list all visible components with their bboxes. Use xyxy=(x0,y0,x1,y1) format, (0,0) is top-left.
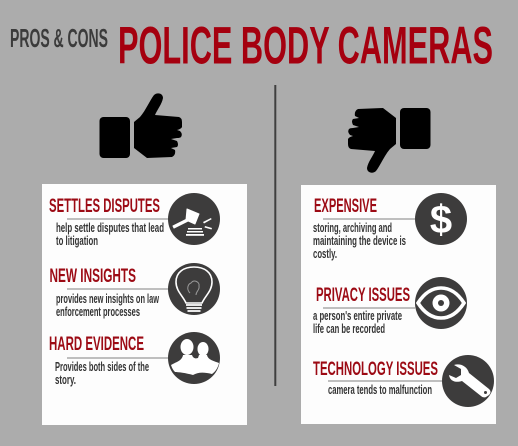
icon: wrench xyxy=(442,355,494,407)
pro: settles disputes: SETTLES DISPUTES xyxy=(49,195,160,217)
pro: hard evidence: HARD EVIDENCE xyxy=(49,333,144,355)
pro: new insights xyxy=(50,265,170,319)
pro: hard evidence: Provides both sides of the xyxy=(55,360,149,374)
con: expensive: costly. xyxy=(313,247,337,261)
con: privacy issues: life can be recorded xyxy=(313,322,385,336)
con: expensive: maintaining the device is xyxy=(313,234,406,248)
pro: new insights: enforcement processes xyxy=(56,305,140,319)
con: technology issues: camera tends to malfunction xyxy=(328,383,432,397)
icon: people xyxy=(168,332,220,384)
center divider xyxy=(274,85,276,386)
pro: settles disputes xyxy=(49,195,170,248)
icon: thumbs down xyxy=(348,108,430,173)
pro: hard evidence xyxy=(49,333,168,387)
subtitle: pros and cons: PROS & CONS xyxy=(10,23,108,53)
con: privacy issues: PRIVACY ISSUES xyxy=(316,284,410,306)
pro: hard evidence: story. xyxy=(55,373,76,387)
con: privacy issues xyxy=(313,284,415,336)
pro: settles disputes: help settle disputes that lead xyxy=(56,221,164,235)
icon: eye xyxy=(415,277,467,329)
icon: light bulb xyxy=(168,263,220,315)
icon: gavel xyxy=(168,193,220,245)
con: technology issues xyxy=(313,358,442,397)
pro: settles disputes: to litigation xyxy=(56,234,98,248)
pro: new insights: provides new insights on law xyxy=(56,292,159,306)
panel: pros xyxy=(42,184,247,425)
icon: thumbs up xyxy=(100,93,182,158)
icon: dollar: $ xyxy=(430,198,452,242)
con: expensive: storing, archiving and xyxy=(313,221,392,235)
pro: new insights: NEW INSIGHTS xyxy=(50,265,136,287)
panel: cons xyxy=(301,185,496,424)
con: expensive: EXPENSIVE xyxy=(314,195,377,217)
con: expensive xyxy=(313,195,415,261)
icon: dollar xyxy=(415,193,467,245)
con: privacy issues: a person's entire private xyxy=(313,309,402,323)
